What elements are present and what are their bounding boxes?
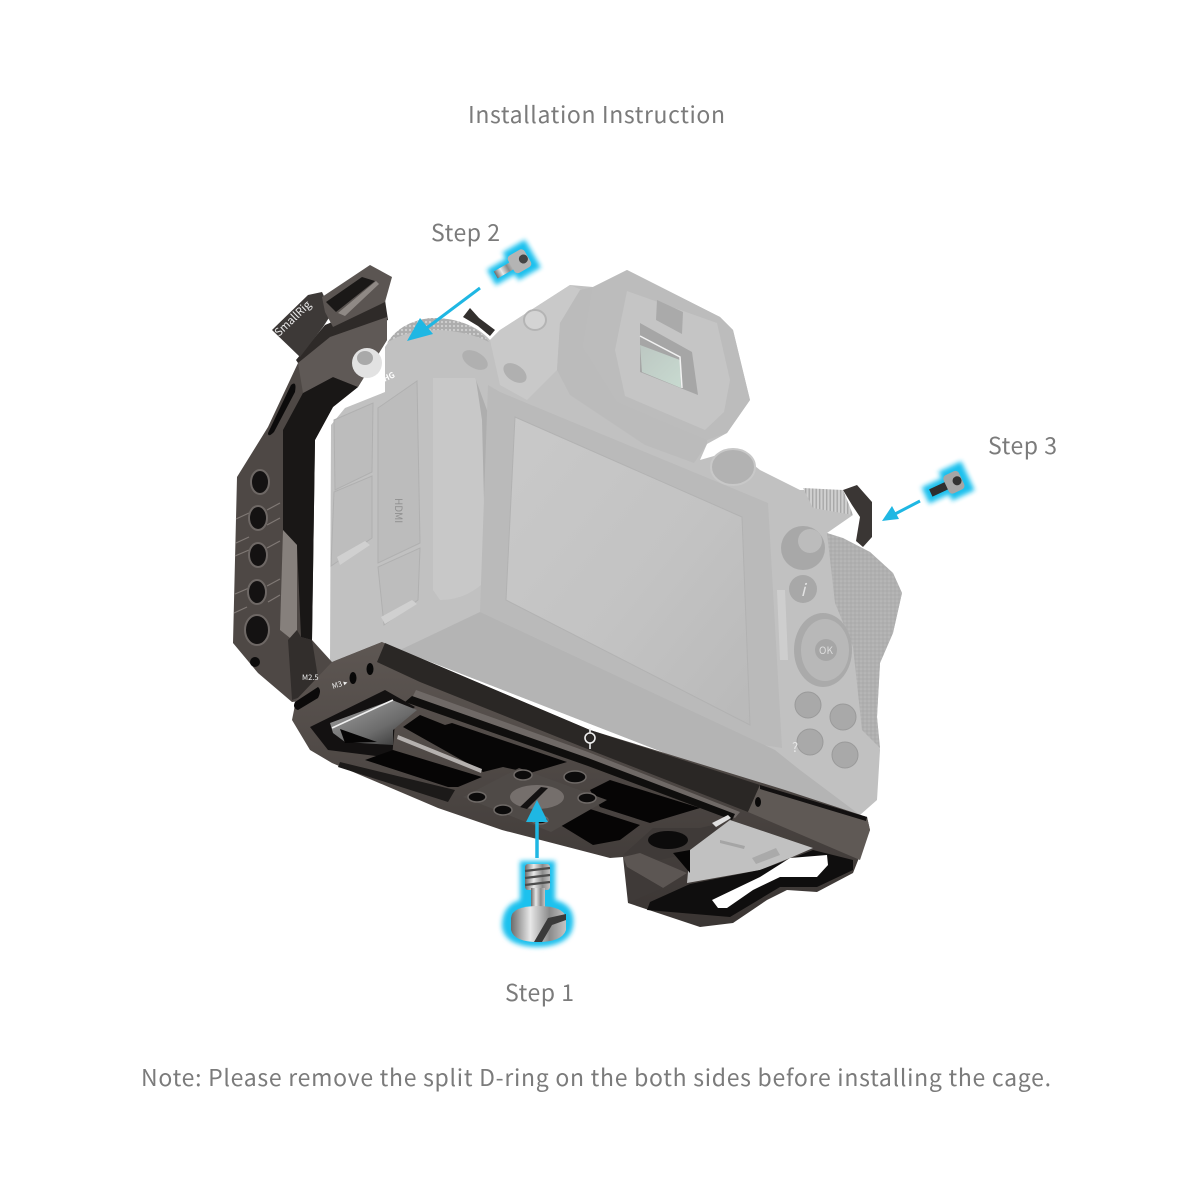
viewfinder lens [640, 345, 681, 388]
screw glow [919, 461, 975, 510]
camera body (ghosted) [330, 270, 902, 815]
M2.5 port [294, 687, 320, 710]
clamp neck filler [296, 300, 388, 366]
eyecup [583, 270, 750, 440]
screw socket [517, 253, 530, 265]
screw head [511, 906, 566, 942]
left pocket frame [310, 690, 415, 758]
underside lettering [720, 840, 745, 849]
door pull lower [337, 541, 370, 565]
camera corner [712, 815, 731, 827]
side door panel centre [378, 381, 420, 563]
cold shoe highlight [338, 281, 379, 316]
hot shoe piece [463, 308, 495, 336]
lower camera band [400, 612, 860, 815]
arrow: step 3 [882, 501, 920, 521]
ledge shadow line [405, 696, 735, 820]
lens highlight [640, 336, 682, 388]
i button [789, 575, 817, 603]
label: step 3: Step 3 [988, 427, 1057, 461]
white thumb knob [352, 348, 382, 378]
cage: side handle [233, 265, 400, 702]
silver wedge [330, 700, 417, 745]
cold shoe clamp [272, 292, 332, 357]
note: Note: Please remove the split D-ring on the both sides before installing the cage. [141, 1059, 1051, 1093]
thumb block face [623, 853, 687, 888]
i button: i [801, 576, 808, 601]
screw glow [483, 240, 541, 291]
small top buttons [459, 346, 530, 387]
arrow: step 1 [526, 800, 548, 858]
eyepiece mast [656, 300, 683, 334]
arrow: step 2 [407, 288, 480, 341]
side plate dark band [283, 377, 358, 640]
side plate ribs [234, 503, 280, 613]
thumb block black notch [673, 850, 690, 873]
grip inner dark [647, 850, 853, 917]
screw socket [951, 475, 963, 487]
right lug top edge [760, 785, 867, 821]
center mount holes [468, 770, 596, 824]
grip texture [827, 533, 902, 748]
thumb block side [627, 867, 663, 903]
screw neck [531, 888, 545, 908]
title: Installation Instruction [468, 96, 725, 130]
d-pad: OK [819, 642, 833, 657]
zoom and menu buttons [795, 692, 858, 768]
help mark: ? [792, 737, 798, 756]
recess C [590, 780, 700, 823]
top circle button [524, 310, 546, 330]
plate marking ring [585, 728, 595, 749]
bracket lower dark [288, 630, 320, 700]
display [506, 417, 750, 725]
ledge light strip [412, 690, 740, 818]
d-pad [794, 613, 852, 687]
upper slot [268, 384, 296, 435]
screw: step 3 [919, 461, 975, 510]
plate outline [292, 642, 870, 927]
label: step 1: Step 1 [505, 974, 574, 1008]
hinge shadow [476, 380, 491, 583]
viewfinder surround [640, 323, 698, 395]
screen edge slit [777, 590, 788, 660]
screw thread [525, 864, 550, 890]
eyecup inner face [615, 291, 730, 430]
joystick [781, 526, 825, 570]
bracket face [298, 317, 387, 393]
side door labels: HDMI [392, 498, 407, 523]
screw shaft [929, 481, 950, 497]
screw head slot [534, 914, 566, 942]
screw: step 2 [483, 240, 541, 291]
dial right [803, 488, 853, 515]
brand: SmallRig [271, 296, 315, 340]
CHG label: CHG [377, 369, 397, 387]
top hump [490, 285, 582, 400]
wedge highlight [332, 700, 393, 728]
camera underside through grip loop [687, 820, 813, 883]
screw head [506, 248, 533, 275]
small holes near labels [350, 663, 374, 684]
side door panel upper [334, 403, 373, 490]
M3 label: M3 ▸ [331, 676, 349, 692]
mounting holes [245, 470, 269, 645]
grip loop opening [712, 855, 828, 908]
center mount plate [463, 768, 607, 832]
screw head [942, 470, 966, 495]
top dial [387, 318, 489, 343]
block hole [648, 831, 688, 849]
M2.5 label: M2.5 [302, 672, 318, 683]
black ledge [377, 643, 760, 812]
underside marks [752, 848, 780, 864]
recess D [557, 808, 640, 845]
screen bezel [480, 385, 782, 748]
side door panel bottom [378, 548, 420, 625]
hinge [433, 378, 491, 600]
left pocket [340, 729, 377, 743]
side door panel lower [331, 476, 372, 566]
cage: bottom plate [292, 642, 870, 927]
front lug [623, 825, 725, 860]
screw shaft [494, 262, 515, 278]
lower groove [338, 762, 455, 802]
right lug plate [748, 785, 870, 860]
eyepiece housing [557, 287, 707, 463]
door pull right [381, 600, 417, 624]
recess A [403, 715, 567, 773]
small lug hole [755, 797, 761, 807]
side plate [233, 317, 400, 702]
rod highlight [397, 735, 482, 773]
label: step 2: Step 2 [431, 214, 500, 248]
chamfer highlight [280, 530, 297, 638]
lower small hole [250, 657, 260, 667]
screw glow [502, 861, 573, 947]
cold shoe top [322, 265, 392, 327]
upper knob [711, 449, 755, 485]
camera silhouette [330, 270, 902, 815]
thread lines [525, 868, 550, 885]
tripod socket [510, 785, 564, 809]
strap lug [843, 485, 872, 547]
cold shoe groove [326, 277, 375, 312]
recess B [365, 750, 482, 787]
screw: step 1 [502, 861, 573, 947]
